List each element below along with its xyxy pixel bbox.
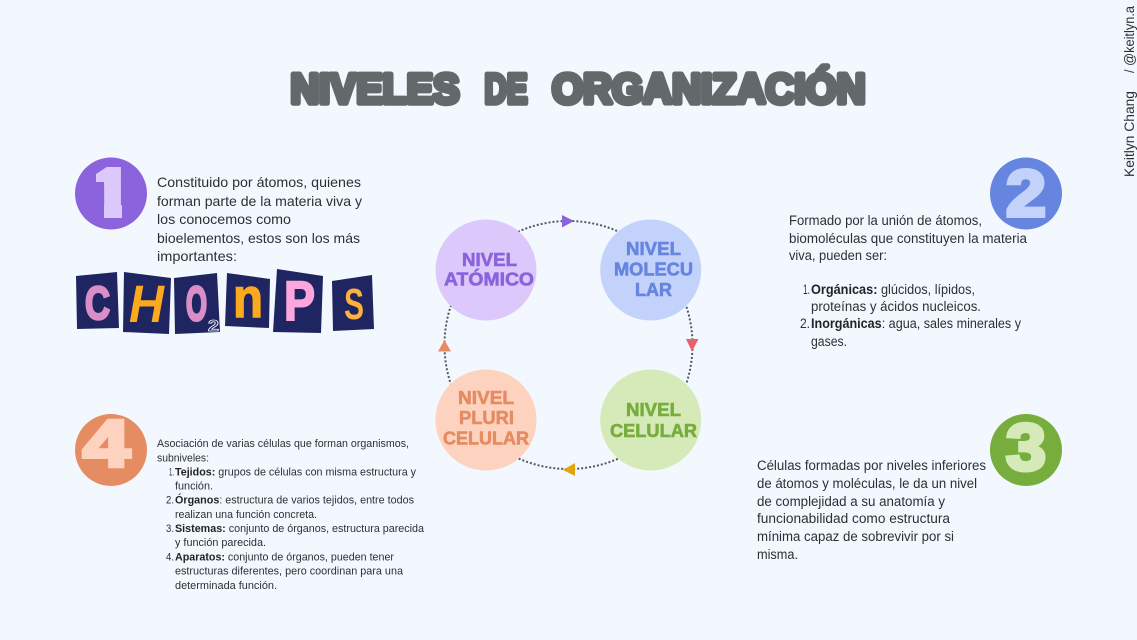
element tiles: CHONPS: n — [233, 266, 263, 329]
node: nivel celular: CELULAR — [610, 421, 697, 441]
text: level 1 description: forman parte de la materia viva y — [157, 193, 362, 209]
author credit — [1122, 6, 1137, 177]
panel: level 4 — [75, 406, 425, 592]
author credit: Keitlyn Chang — [1122, 91, 1137, 177]
text: level 4 description: realizan una función concreta. — [175, 509, 317, 521]
element tiles: CHONPS: O — [186, 278, 207, 331]
node: nivel pluricelular: PLURI — [459, 408, 514, 428]
text: level 2 description: biomoléculas que constituyen la materia — [789, 231, 1027, 246]
cycle diagram — [436, 215, 701, 476]
text: level 2 description: viva, pueden ser: — [789, 248, 887, 263]
text: level 4 description: determinada función. — [175, 580, 277, 592]
badge: number 2: 2 — [1006, 156, 1046, 230]
text: level 4 description: Aparatos: conjunto de órganos, pueden tener — [175, 552, 394, 564]
element tiles: CHONPS: P — [284, 269, 315, 332]
text: level 3 description: de complejidad a su anatomía y — [757, 494, 945, 509]
panel: level 1 — [75, 156, 374, 335]
element tiles: CHONPS: S — [344, 280, 364, 329]
text: level 2 description: Formado por la unión de átomos, — [789, 213, 982, 228]
text: level 2 description: Orgánicas: glúcidos, lípidos, — [811, 282, 975, 297]
element tiles: CHONPS: H — [129, 275, 166, 334]
text: level 1 description: importantes: — [157, 248, 237, 264]
text: level 4 description: Asociación de varias células que forman organismos, — [157, 438, 409, 450]
node: nivel atómico: ATÓMICO — [444, 268, 534, 290]
badge: number 1: 1 — [93, 156, 129, 230]
text: level 4 description: Sistemas: conjunto de órganos, estructura parecida — [175, 523, 425, 535]
node: nivel atómico: NIVEL — [462, 250, 517, 270]
text: level 3 description: de átomos y moléculas, le da un nivel — [757, 476, 977, 491]
panel: level 2 — [789, 156, 1062, 349]
node: nivel molecular: MOLECU — [614, 260, 693, 280]
text: level 3 description: misma. — [757, 547, 798, 562]
title — [290, 64, 866, 112]
node: nivel atómico — [436, 220, 536, 320]
node: nivel pluricelular — [436, 370, 536, 470]
badge: number 4 — [75, 406, 147, 486]
element tiles: CHONPS — [76, 266, 374, 335]
text: level 3 description: mínima capaz de sobrevivir por si — [757, 529, 954, 544]
badge: number 4: 4 — [83, 406, 130, 480]
author credit: / @keitlyn.a — [1122, 6, 1137, 73]
text: level 4 description: 1. — [169, 466, 174, 478]
element tiles: CHONPS: 2 — [208, 318, 219, 335]
text: level 1 description: Constituido por átomos, quienes — [157, 174, 361, 190]
title: DE — [484, 65, 528, 112]
title: ORGANIZACIÓN — [552, 64, 866, 112]
text: level 4 description: subniveles: — [157, 452, 209, 464]
arrow: atomic to molecular — [562, 215, 574, 228]
element tiles: CHONPS: C — [85, 277, 110, 329]
node: nivel molecular: LAR — [635, 280, 672, 300]
node: nivel celular — [600, 370, 701, 470]
text: level 1 description: los conocemos como — [157, 211, 291, 227]
text: level 1 description — [157, 174, 362, 264]
dotted cycle ring — [444, 221, 692, 469]
text: level 2 description: 1. — [803, 282, 810, 297]
node: nivel pluricelular: NIVEL — [458, 388, 514, 408]
text: level 3 description — [757, 458, 986, 562]
text: level 3 description: Células formadas por niveles inferiores — [757, 458, 986, 473]
text: level 2 description: gases. — [811, 334, 847, 349]
node: nivel molecular: NIVEL — [626, 239, 681, 259]
arrow: pluricellular to atomic — [438, 340, 451, 352]
panel: level 3 — [757, 410, 1062, 562]
badge: number 3: 3 — [1006, 410, 1046, 484]
arrow: molecular to cellular — [686, 339, 698, 352]
text: level 4 description: 4. — [166, 552, 174, 564]
text: level 4 description: estructuras diferentes, pero coordinan para una — [175, 566, 404, 578]
text: level 2 description: Inorgánicas: agua, sales minerales y — [811, 316, 1021, 331]
text: level 2 description: proteínas y ácidos nucleicos. — [811, 299, 981, 314]
text: level 1 description: bioelementos, estos son los más — [157, 230, 360, 246]
title: NIVELES — [290, 65, 460, 112]
text: level 3 description: funcionabilidad como estructura — [757, 511, 950, 526]
badge: number 3 — [990, 410, 1062, 486]
text: level 4 description: función. — [175, 480, 213, 492]
arrow: cellular to pluricellular — [563, 463, 575, 476]
text: level 2 description — [789, 213, 1027, 349]
text: level 4 description: 3. — [166, 523, 174, 535]
text: level 4 description: Tejidos: grupos de células con misma estructura y — [175, 466, 416, 478]
text: level 4 description: 2. — [166, 494, 174, 506]
text: level 4 description: Órganos: estructura de varios tejidos, entre todos — [175, 494, 414, 506]
text: level 4 description: y función parecida. — [175, 537, 266, 549]
node: nivel pluricelular: CELULAR — [443, 428, 529, 448]
badge: number 1 — [75, 156, 147, 230]
text: level 4 description — [157, 438, 425, 592]
badge: number 2 — [990, 156, 1062, 230]
node: nivel celular: NIVEL — [626, 400, 681, 420]
text: level 2 description: 2. — [800, 316, 810, 331]
node: nivel molecular — [600, 220, 701, 320]
